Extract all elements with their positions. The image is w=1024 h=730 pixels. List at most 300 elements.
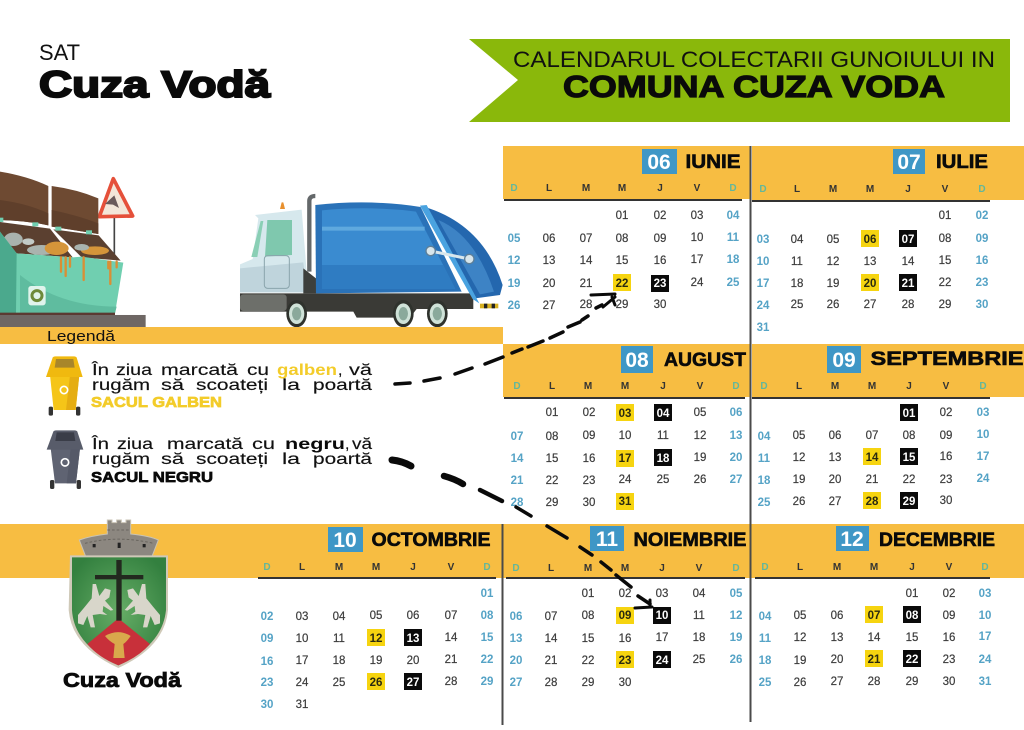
calendar: August: 21: [511, 475, 524, 487]
calendar: September: 22: [903, 474, 915, 486]
calendar: December: V: [946, 562, 953, 573]
icon: grey bin: [47, 430, 83, 489]
calendar: November: 20: [510, 655, 522, 667]
calendar: September: D: [979, 381, 987, 392]
calendar: August: 16: [583, 453, 595, 465]
calendar: November: 22: [582, 655, 594, 667]
calendar: August: 12: [694, 430, 706, 442]
calendar: October: 10: [333, 529, 357, 552]
calendar: August: 19: [694, 452, 706, 464]
legend text: black: În: [91, 434, 109, 453]
calendar: September: 14: [866, 452, 879, 464]
calendar: October: 17: [296, 655, 308, 667]
calendar: October: 05: [370, 610, 382, 622]
calendar: June: D: [729, 183, 737, 194]
calendar: August: L: [549, 381, 555, 392]
calendar: November: 13: [510, 633, 522, 645]
calendar: June: 10: [691, 232, 703, 244]
calendar: November: 26: [730, 654, 742, 666]
legend text: black: SACUL NEGRU: [91, 469, 213, 486]
calendar: October: J: [410, 562, 416, 573]
calendar: September: 05: [793, 430, 805, 442]
legend text: black: negru: [285, 436, 345, 453]
calendar: November: 25: [693, 654, 705, 666]
calendar: August: 31: [619, 496, 632, 508]
calendar: December: DECEMBRIE: [879, 530, 995, 551]
calendar: September: D: [760, 381, 768, 392]
coat of arms: [69, 520, 168, 668]
calendar: July: 12: [827, 256, 839, 268]
calendar: December: 14: [868, 632, 881, 644]
legend text: black: la: [282, 451, 300, 468]
calendar: September: 10: [977, 429, 989, 441]
calendar: September: 24: [977, 473, 990, 485]
calendar: September: 18: [758, 475, 771, 487]
calendar: October: 20: [407, 655, 419, 667]
calendar: December: 23: [943, 654, 955, 666]
calendar: August: 10: [619, 430, 631, 442]
calendar: November: D: [732, 563, 740, 574]
calendar: June: 07: [580, 233, 592, 245]
calendar: September: SEPTEMBRIE: [870, 349, 1024, 370]
calendar: October: 15: [481, 632, 494, 644]
calendar: December: 28: [868, 676, 880, 688]
calendar: September: M: [868, 381, 876, 392]
calendar: November: 02: [619, 588, 631, 600]
calendar: October: 21: [445, 654, 457, 666]
calendar: December: 05: [794, 610, 806, 622]
legend text: yellow: ziua: [116, 362, 152, 379]
calendar: November: 14: [545, 633, 558, 645]
calendar: October: M: [335, 562, 343, 573]
calendar: November: 30: [619, 677, 631, 689]
calendar: October: 26: [370, 677, 382, 689]
calendar: June: 08: [616, 233, 628, 245]
calendar: September: 01: [903, 408, 916, 420]
legend text: yellow: scoateți: [196, 377, 268, 394]
village title: [39, 40, 271, 105]
calendar: August: D: [732, 381, 740, 392]
calendar: November: 10: [656, 610, 668, 622]
legend text: black: [91, 434, 372, 486]
calendar: June: 27: [543, 300, 555, 312]
calendar: December: 19: [794, 655, 806, 667]
calendar: November: 27: [510, 677, 522, 689]
calendar: November: M: [584, 563, 592, 574]
calendar: October: 03: [296, 611, 308, 623]
calendar: September: 07: [866, 430, 878, 442]
calendar: August: 28: [511, 497, 524, 509]
calendar: December: D: [761, 562, 769, 573]
calendar: November: 07: [545, 611, 557, 623]
calendar: October: 24: [296, 677, 309, 689]
calendar: December: M: [870, 562, 878, 573]
legend text: yellow: marcată: [161, 362, 238, 379]
calendar: December: 11: [759, 633, 772, 645]
calendar: August: 02: [583, 407, 595, 419]
calendar: September: 06: [829, 430, 841, 442]
calendar: July: D: [978, 184, 986, 195]
calendar: August: 13: [730, 430, 742, 442]
calendar: August: 05: [694, 407, 706, 419]
calendar: July: IULIE: [936, 152, 988, 173]
calendar: July: 01: [939, 210, 951, 222]
calendar: July: 11: [791, 256, 803, 268]
calendar: November: NOIEMBRIE: [634, 530, 746, 551]
calendar: July: 02: [976, 210, 988, 222]
calendar: August: 26: [694, 474, 706, 486]
calendar: June: 21: [580, 278, 592, 290]
calendar: June: 26: [508, 300, 520, 312]
calendar: September: 19: [793, 474, 805, 486]
legend text: yellow: SACUL GALBEN: [91, 394, 222, 411]
legend text: yellow: rugăm: [92, 377, 150, 394]
calendar: August: 27: [730, 474, 742, 486]
calendar: December: D: [981, 562, 989, 573]
calendar: June: 06: [647, 151, 671, 174]
calendar: December: 07: [868, 610, 880, 622]
calendar: August: J: [660, 381, 666, 392]
arrow: black legend to November 10: [392, 460, 652, 608]
calendar: October: D: [483, 562, 491, 573]
calendar: October: 29: [481, 676, 493, 688]
legend text: yellow: În: [91, 360, 109, 379]
calendar: July: 10: [757, 256, 769, 268]
legend text: yellow: să: [161, 377, 184, 394]
calendar: October: 13: [407, 633, 419, 645]
legend text: black: să: [161, 451, 184, 468]
calendar: August: 01: [546, 407, 558, 419]
calendar: July: 15: [939, 255, 951, 267]
calendar: December: 25: [759, 677, 772, 689]
calendar: July: 21: [902, 278, 915, 290]
legend text: black: rugăm: [92, 451, 150, 468]
calendar: September: 03: [977, 407, 989, 419]
calendar: September: 12: [793, 452, 805, 464]
calendar: June: 28: [580, 299, 592, 311]
calendar: June: 20: [543, 278, 555, 290]
calendar: September: 04: [758, 431, 771, 443]
calendar: December: 01: [906, 588, 918, 600]
calendar: September: L: [796, 381, 802, 392]
calendar: October: 04: [333, 611, 346, 623]
calendar: June: M: [582, 183, 590, 194]
calendar: July: 28: [902, 299, 914, 311]
calendar: September: 13: [829, 452, 841, 464]
calendar: August: 23: [583, 475, 595, 487]
calendar: October: 14: [445, 632, 458, 644]
calendar: June: 09: [654, 233, 666, 245]
calendar: November: 05: [730, 588, 743, 600]
calendar: November: M: [621, 563, 629, 574]
calendar: November: V: [696, 563, 703, 574]
calendar: June: M: [618, 183, 626, 194]
calendar: June: 04: [727, 210, 740, 222]
calendar: August: 09: [583, 430, 595, 442]
calendar: October: 09: [261, 633, 273, 645]
calendar: July: 20: [864, 278, 876, 290]
calendar: August: 14: [511, 453, 524, 465]
calendar: November: 19: [730, 632, 742, 644]
calendar: October: 12: [370, 633, 382, 645]
calendar: July: L: [794, 184, 800, 195]
calendar: July: 18: [791, 278, 803, 290]
calendar: August: 06: [730, 407, 742, 419]
calendar: July: [752, 146, 1024, 334]
calendar: November: 04: [693, 588, 706, 600]
legend text: yellow: galben: [277, 362, 337, 379]
calendar: July: 30: [976, 299, 988, 311]
bottom yellow band: [0, 524, 1024, 578]
calendar: November: 23: [619, 655, 631, 667]
calendar: December: 27: [831, 676, 843, 688]
calendar: November: 01: [582, 588, 594, 600]
green title banner: COMUNA CUZA VODA: [563, 69, 945, 104]
calendar: November: 06: [510, 611, 522, 623]
calendar: September: V: [943, 381, 950, 392]
calendar: July: V: [942, 184, 949, 195]
legend text: black: poartă: [313, 451, 372, 468]
dividers: [502, 146, 752, 725]
legend text: black: ,: [345, 436, 349, 453]
legend text: yellow: poartă: [313, 377, 372, 394]
calendar: August: D: [513, 381, 521, 392]
calendar: July: 22: [939, 277, 951, 289]
calendar: December: 03: [979, 588, 991, 600]
calendar: June: D: [510, 183, 518, 194]
calendar: December: L: [797, 562, 803, 573]
calendar: June: 23: [654, 278, 666, 290]
calendar: August: 07: [511, 431, 523, 443]
calendar: November: 24: [656, 655, 669, 667]
calendar: October: 31: [296, 699, 308, 711]
calendar: November: 09: [619, 610, 631, 622]
calendar: August: 11: [657, 430, 669, 442]
calendar: June: 30: [654, 299, 666, 311]
calendar: October: D: [263, 562, 271, 573]
calendar: June: J: [657, 183, 663, 194]
calendar: October: 07: [445, 610, 457, 622]
calendar: June: 19: [508, 278, 520, 290]
calendar: August: 24: [619, 474, 632, 486]
calendar: October: 30: [261, 699, 273, 711]
calendar: July: 19: [827, 278, 839, 290]
calendar: October: 16: [261, 656, 273, 668]
calendar: December: 31: [979, 676, 992, 688]
calendar: December: 17: [979, 631, 991, 643]
calendar: August: 15: [546, 453, 558, 465]
calendar: December: 12: [794, 632, 806, 644]
calendar: June: 14: [580, 255, 593, 267]
calendar: September: 26: [793, 496, 805, 508]
calendar: July: 25: [791, 299, 803, 311]
calendar: September: 28: [866, 496, 879, 508]
calendar: December: 18: [759, 655, 772, 667]
calendar: July: M: [829, 184, 837, 195]
calendar: September: 23: [940, 474, 952, 486]
calendar: August: 20: [730, 452, 742, 464]
village title: Cuza Vodă: [39, 64, 271, 105]
calendar: June: 01: [616, 210, 628, 222]
calendar: June: 16: [654, 255, 666, 267]
calendar: November: 11: [693, 610, 705, 622]
calendar: December: 21: [868, 654, 881, 666]
calendar: October: 10: [296, 633, 308, 645]
illustration: garbage containers and warning sign: [0, 172, 146, 327]
calendar: October: 28: [445, 676, 457, 688]
calendar: June: IUNIE: [686, 152, 740, 173]
calendar: July: 31: [757, 322, 770, 334]
calendar: November: 28: [545, 677, 557, 689]
calendar: October: 27: [407, 677, 419, 689]
calendar: September: 30: [940, 495, 952, 507]
illustration: blue garbage truck: [240, 196, 503, 327]
calendar: December: 15: [906, 632, 918, 644]
calendar: June: V: [694, 183, 701, 194]
calendar: December: 29: [906, 676, 918, 688]
calendar: December: J: [909, 562, 915, 573]
calendar: September: 09: [940, 430, 952, 442]
calendar: December: [755, 526, 995, 689]
calendar: July: 14: [902, 256, 915, 268]
coat of arms caption: Cuza Vodă: [63, 670, 182, 692]
calendar: September: 02: [940, 407, 952, 419]
calendar: June: [503, 146, 750, 312]
legend text: black: scoateți: [196, 451, 268, 468]
calendar: August: 08: [625, 349, 649, 372]
calendar: October: 23: [261, 677, 273, 689]
calendar: June: 29: [616, 299, 628, 311]
calendar: July: M: [866, 184, 874, 195]
calendar: August: AUGUST: [664, 350, 746, 371]
calendar: July: 29: [939, 299, 951, 311]
calendar: October: M: [372, 562, 380, 573]
calendar: July: 07: [897, 151, 921, 174]
calendar: December: 24: [979, 654, 992, 666]
calendar: July: 06: [864, 234, 876, 246]
calendar: December: 22: [906, 654, 918, 666]
calendar: September: M: [831, 381, 839, 392]
calendar: December: 06: [831, 610, 843, 622]
calendar: October: 06: [407, 610, 419, 622]
calendar: July: 27: [864, 299, 876, 311]
calendar: October: OCTOMBRIE: [372, 530, 490, 551]
calendar: September: 08: [903, 430, 915, 442]
calendar: December: 20: [831, 654, 843, 666]
calendar: September: 20: [829, 474, 841, 486]
legend heading band: [0, 327, 503, 345]
legend text: black: cu: [252, 436, 275, 453]
calendar: July: D: [759, 184, 767, 195]
calendar: July: 08: [939, 233, 951, 245]
calendar: October: 11: [333, 633, 345, 645]
calendar: November: J: [659, 563, 665, 574]
calendar: June: 13: [543, 255, 555, 267]
calendar: June: 18: [727, 254, 740, 266]
legend text: black: vă: [352, 436, 372, 453]
calendar: August: 18: [657, 453, 670, 465]
icon: yellow bin: [46, 356, 83, 416]
calendar: July: 05: [827, 234, 839, 246]
calendar: July: 03: [757, 234, 769, 246]
calendar: August: 25: [657, 474, 669, 486]
calendar: October: 22: [481, 654, 493, 666]
calendar: December: 02: [943, 588, 955, 600]
calendar: September: J: [906, 381, 912, 392]
calendar: November: 18: [693, 632, 705, 644]
calendar: September: 29: [903, 496, 915, 508]
calendar: December: 12: [840, 528, 864, 551]
calendar: July: 07: [902, 234, 914, 246]
calendar: November: 16: [619, 633, 631, 645]
calendar: August: 03: [619, 408, 631, 420]
calendar: August: 04: [657, 408, 670, 420]
calendar: October: 19: [370, 655, 382, 667]
village title: SAT: [39, 40, 80, 65]
calendar: October: 08: [481, 610, 494, 622]
calendar: June: 25: [727, 277, 740, 289]
calendar: October: [258, 527, 496, 711]
calendar: November: D: [512, 563, 520, 574]
calendar: October: L: [299, 562, 305, 573]
calendar: December: 30: [943, 676, 955, 688]
calendar: August: V: [697, 381, 704, 392]
calendar: September: 27: [829, 496, 841, 508]
calendar: July: 04: [791, 234, 804, 246]
calendar: November: 03: [656, 588, 668, 600]
calendar: July: 17: [757, 278, 769, 290]
calendar: September: 16: [940, 451, 952, 463]
calendar: December: 16: [943, 632, 955, 644]
calendar: June: 05: [508, 233, 521, 245]
calendar: October: 02: [261, 611, 273, 623]
calendar: November: [506, 526, 746, 689]
calendar: June: 06: [543, 233, 555, 245]
arrow: yellow legend to June 22: [395, 294, 615, 384]
calendar: December: 09: [943, 610, 955, 622]
calendar: October: 25: [333, 677, 345, 689]
calendar: December: M: [833, 562, 841, 573]
calendar: July: 26: [827, 299, 839, 311]
calendar: July: 16: [976, 255, 988, 267]
calendar: August: 30: [583, 497, 595, 509]
calendar: December: 10: [979, 610, 991, 622]
calendar: December: 08: [906, 610, 919, 622]
calendar: November: 17: [656, 632, 668, 644]
calendar: July: 13: [864, 256, 876, 268]
calendar: November: L: [548, 563, 554, 574]
legend text: yellow: cu: [247, 362, 269, 379]
calendar: August: 22: [546, 475, 558, 487]
calendar: June: L: [546, 183, 552, 194]
calendar: June: 02: [654, 210, 666, 222]
calendar: September: [752, 344, 1024, 509]
calendar: July: 23: [976, 277, 988, 289]
calendar: August: 08: [546, 431, 558, 443]
legend text: yellow: la: [282, 377, 300, 394]
calendar: July: 09: [976, 233, 988, 245]
calendar: June: 17: [691, 254, 703, 266]
legend text: yellow: [91, 360, 372, 411]
legend text: yellow: vă: [349, 362, 372, 379]
calendar: August: M: [584, 381, 592, 392]
calendar: October: V: [448, 562, 455, 573]
calendar: June: 15: [616, 255, 628, 267]
calendar: July: 24: [757, 300, 770, 312]
calendar: August: 29: [546, 497, 558, 509]
calendar: September: 21: [866, 474, 878, 486]
calendar: June: 24: [691, 277, 704, 289]
